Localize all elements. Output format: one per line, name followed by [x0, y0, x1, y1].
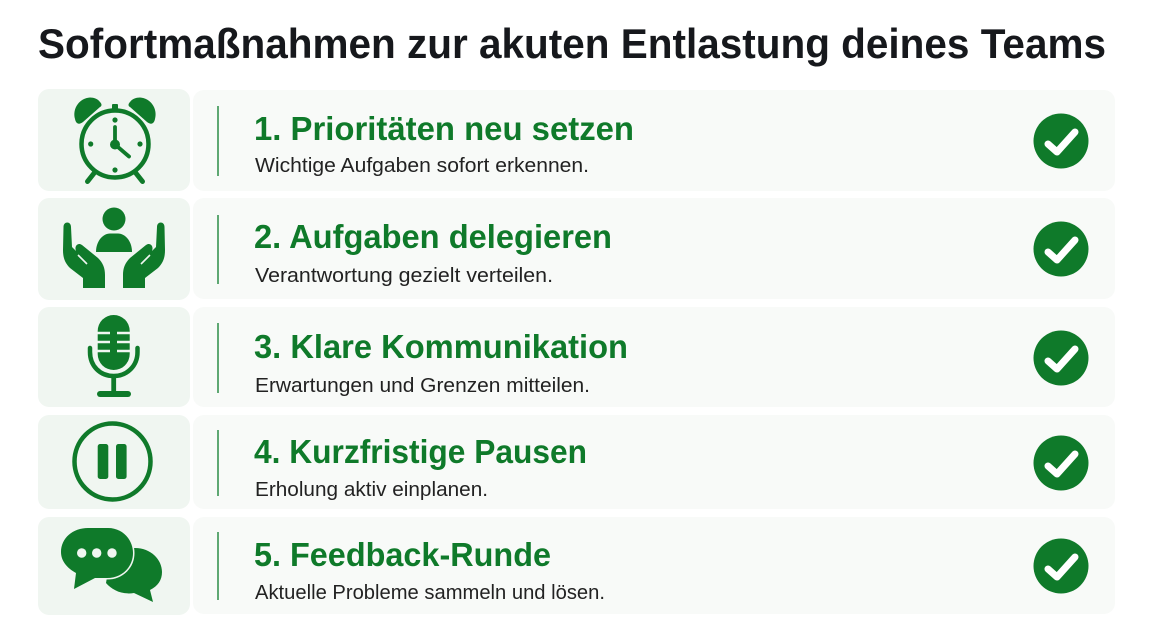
heading: step 2: 2. Aufgaben delegieren: [254, 219, 612, 256]
text: step 2: Verantwortung gezielt verteilen.: [255, 264, 553, 287]
heading: step 4: 4. Kurzfristige Pausen: [254, 434, 587, 471]
icon: check: [1034, 538, 1088, 594]
icon: check: [1034, 436, 1088, 490]
heading: step 1: 1. Prioritäten neu setzen: [254, 111, 634, 148]
icon: check: [1034, 330, 1088, 386]
panel: step 5: [38, 517, 1115, 615]
icon: alarm clock: [74, 98, 156, 182]
heading: step 5: 5. Feedback-Runde: [254, 537, 551, 574]
title: Sofortmaßnahmen zur akuten Entlastung deines Teams: [38, 20, 1106, 67]
icon: hands holding person: [63, 208, 165, 288]
text: step 4: Erholung aktiv einplanen.: [255, 478, 488, 501]
panel: step 1: [38, 89, 1115, 191]
icon: microphone: [90, 315, 138, 397]
panel: step 4: [38, 415, 1115, 509]
text: step 1: Wichtige Aufgaben sofort erkennen.: [255, 154, 589, 177]
panel: step 2: [38, 198, 1115, 300]
icon: check: [1034, 114, 1088, 168]
icon: speech bubbles: [61, 528, 162, 602]
icon: check: [1034, 222, 1088, 276]
text: step 3: Erwartungen und Grenzen mitteilen.: [255, 374, 590, 397]
heading: step 3: 3. Klare Kommunikation: [254, 329, 628, 366]
icon: pause: [74, 424, 150, 500]
panel: step 3: [38, 307, 1115, 407]
text: step 5: Aktuelle Probleme sammeln und lösen.: [255, 581, 605, 604]
